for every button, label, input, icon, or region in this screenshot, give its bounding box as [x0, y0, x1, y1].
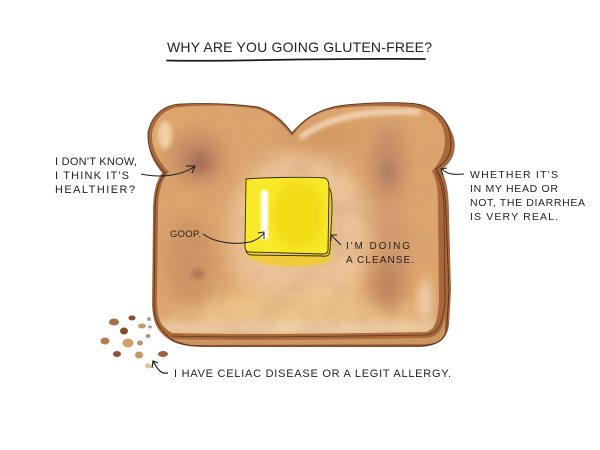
toast — [148, 100, 455, 347]
arrow: cleanse — [331, 235, 341, 245]
label: diarrhea: IS VERY REAL. — [470, 211, 558, 223]
butter — [244, 177, 333, 266]
label: cleanse: I'M DOING — [346, 241, 410, 252]
label: diarrhea — [441, 168, 585, 223]
toast ink outline — [148, 103, 451, 346]
label: celiac — [152, 361, 451, 380]
crumbs — [100, 316, 168, 368]
label: healthier: I DON'T KNOW, — [55, 156, 137, 168]
label: healthier: HEALTHIER? — [55, 184, 135, 196]
butter highlight — [261, 190, 268, 240]
label: goop: GOOP. — [170, 229, 201, 240]
label: diarrhea: NOT, THE DIARRHEA — [470, 197, 585, 209]
toast inner crust line — [172, 172, 445, 337]
label: diarrhea: IN MY HEAD OR — [470, 183, 558, 195]
label: goop — [170, 229, 264, 243]
label: healthier: I THINK IT'S — [55, 170, 129, 182]
label: cleanse — [331, 235, 414, 266]
label: diarrhea: WHETHER IT'S — [470, 169, 558, 181]
butter outline — [245, 177, 332, 256]
toast lower crust band — [172, 315, 445, 345]
toast crust — [148, 103, 455, 347]
label: cleanse: A CLEANSE. — [346, 255, 414, 266]
butter pat — [245, 177, 329, 254]
label: celiac: I HAVE CELIAC DISEASE OR A LEGIT ALLERGY. — [174, 368, 451, 380]
arrow: healthier — [141, 166, 195, 176]
butter melt — [244, 180, 333, 266]
toast watercolor shading — [156, 106, 437, 334]
arrow: goop — [203, 232, 264, 243]
arrow: celiac — [152, 361, 168, 373]
arrow: diarrhea — [441, 168, 464, 175]
title: WHY ARE YOU GOING GLUTEN-FREE? — [167, 39, 432, 55]
label: healthier — [55, 156, 195, 196]
toast surface — [152, 106, 445, 334]
